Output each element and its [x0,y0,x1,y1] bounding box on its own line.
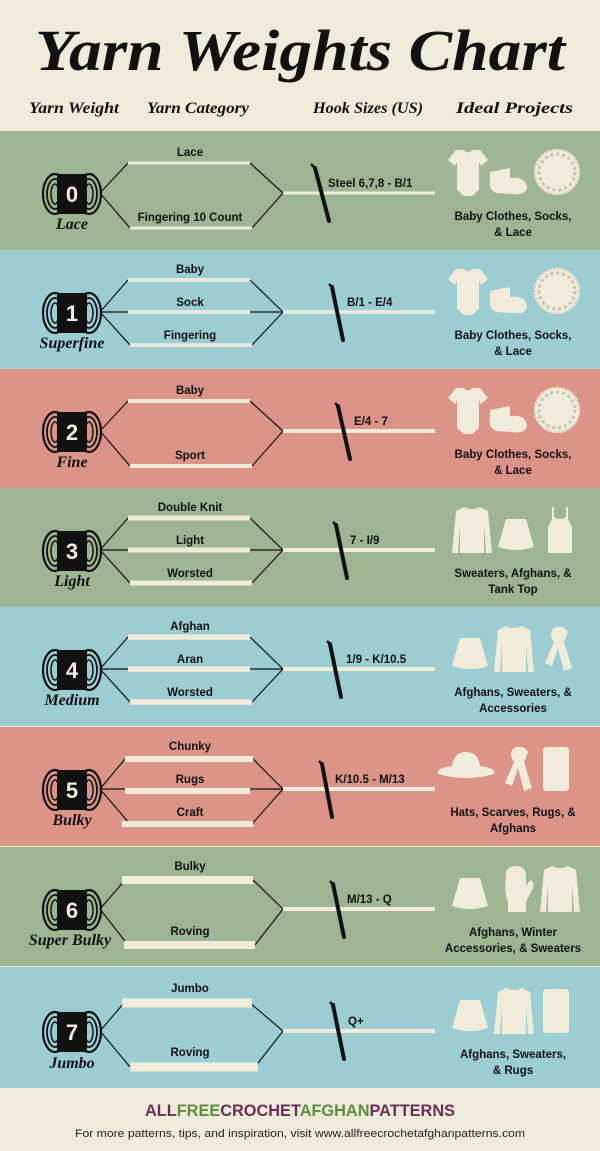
row 1: superfine [0,250,600,369]
row 7: jumbo: Jumbo [48,1055,95,1072]
row 1: superfine: Baby [176,264,205,276]
row 6: super bulky: Accessories, & Sweaters [445,943,581,955]
hook: Steel 6,7,8 - B/1 [328,178,413,190]
row 5: bulky: Chunky [169,741,212,753]
row 2: fine [0,369,600,488]
row 7: jumbo: Afghans, Sweaters, [460,1049,566,1061]
row 1: superfine: Sock [176,297,204,309]
row 1: superfine: Baby Clothes, Socks, [455,330,571,342]
row 6: super bulky: M/13 - Q [347,894,392,906]
projects: & Lace [494,227,532,239]
row 5: bulky: K/10.5 - M/13 [335,774,405,786]
column headers [29,100,573,117]
row 4: medium: 1/9 - K/10.5 [346,654,407,666]
row 2: fine: Fine [55,454,88,471]
column headers: Ideal Projects [455,100,573,117]
row 2: fine: & Lace [494,465,532,477]
row 2: fine: Baby [176,385,205,397]
row 3: light: Worsted [167,568,213,580]
row 4: medium: Afghans, Sweaters, & [454,687,572,699]
row 3: light: Tank Top [488,584,538,596]
spool 0: Lace [55,216,88,233]
row 5: bulky: 5 [66,778,78,803]
row 3: light: 7 - I/9 [350,535,379,547]
row 3: light: Light [53,573,90,590]
strands: Lace [177,147,203,159]
row 1: superfine: & Lace [494,346,532,358]
row 4: medium: 4 [66,658,79,683]
row 5: bulky [0,727,600,846]
row 7: jumbo: Jumbo [171,983,209,995]
row 7: jumbo: Roving [171,1047,209,1059]
row 5: bulky: Craft [177,807,204,819]
row 1: superfine: Superfine [40,335,104,352]
row 7: jumbo: Q+ [348,1016,364,1028]
spool 0 [43,174,101,233]
row 6: super bulky [0,847,600,966]
row 2: fine: Sport [175,450,205,462]
row 5: bulky: Bulky [51,812,92,829]
row 6: super bulky: Afghans, Winter [469,927,558,939]
row 5: bulky: Hats, Scarves, Rugs, & [450,807,576,819]
row 1: superfine: 1 [66,301,78,326]
row 4: medium: Worsted [167,687,213,699]
title: Yarn Weights Chart [35,18,567,83]
column headers: Yarn Weight [29,100,120,117]
projects: Baby Clothes, Socks, [455,211,571,223]
projects [448,149,580,239]
row 4: medium: Accessories [479,703,547,715]
row 1: superfine: Fingering [164,330,216,342]
footer url: For more patterns, tips, and inspiration, visit www.allfreecrochetafghanpatterns.com [75,1128,525,1140]
row 4: medium [0,607,600,726]
column headers: Yarn Category [147,100,250,117]
row 6: super bulky: Super Bulky [29,932,112,949]
row 3: light: Sweaters, Afghans, & [454,568,572,580]
row 7: jumbo: 7 [66,1020,78,1045]
row 3: light: Light [176,535,204,547]
row 6: super bulky: Bulky [174,861,206,873]
row 0: lace [0,131,600,250]
row 4: medium: Medium [43,692,100,709]
row 6: super bulky: 6 [66,898,78,923]
hook [311,164,413,221]
row 1: superfine: B/1 - E/4 [347,297,393,309]
row 5: bulky: Afghans [490,823,536,835]
footer logo: ALLFREECROCHETAFGHANPATTERNS [145,1101,455,1120]
row 6: super bulky: Roving [171,926,209,938]
row 2: fine: 2 [66,420,78,445]
row 4: medium: Aran [177,654,203,666]
row 2: fine: E/4 - 7 [354,416,388,428]
strands [100,147,435,228]
row 3: light: 3 [66,539,78,564]
strands: Fingering 10 Count [138,212,243,224]
row 7: jumbo [0,967,600,1088]
row 3: light: Double Knit [158,502,222,514]
row 7: jumbo: & Rugs [493,1065,533,1077]
row 2: fine: Baby Clothes, Socks, [455,449,571,461]
row 5: bulky: Rugs [176,774,204,786]
row 3: light [0,488,600,607]
column headers: Hook Sizes (US) [312,100,423,117]
row 4: medium: Afghan [170,621,210,633]
spool 0: 0 [66,182,78,207]
